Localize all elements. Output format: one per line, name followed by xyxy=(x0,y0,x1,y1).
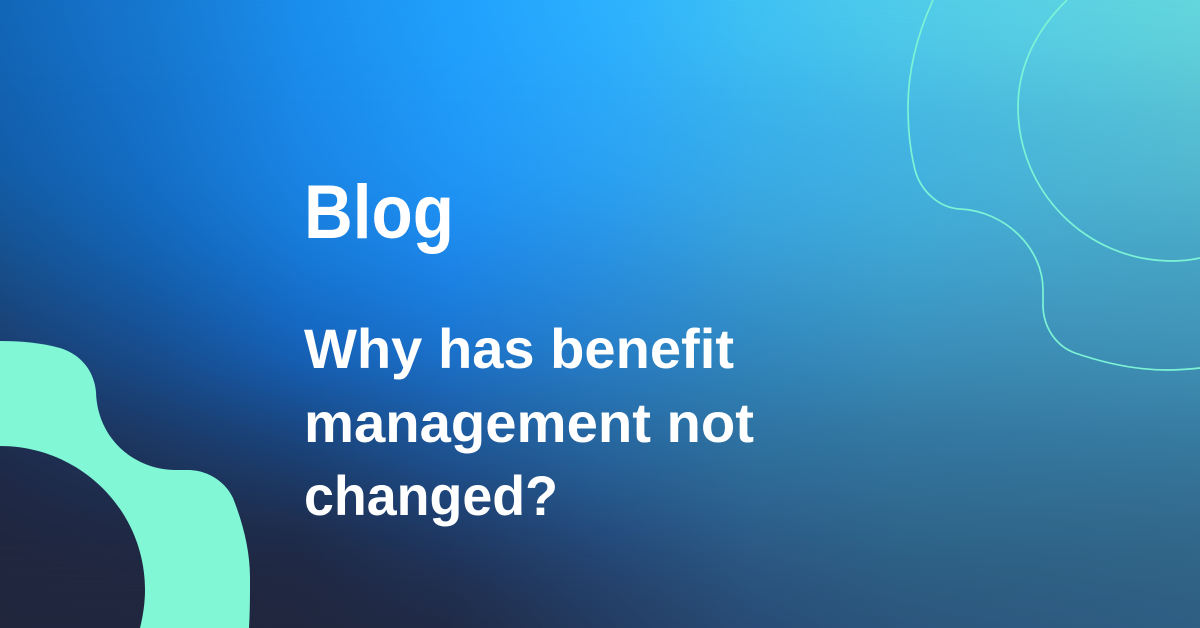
headline line 2: management not xyxy=(304,391,754,454)
headline text xyxy=(304,317,754,527)
title block xyxy=(304,170,754,527)
decorative outlines: top-right xyxy=(908,0,1200,370)
headline line 1: Why has benefit xyxy=(304,317,734,380)
outline: inner circle, clipped to the right and top edges xyxy=(1018,0,1200,261)
outline: outer blob xyxy=(908,0,1200,370)
headline line 3: changed? xyxy=(304,464,558,527)
heading: Blog: Blog xyxy=(304,170,454,255)
decorative shape: bottom-left green ring xyxy=(0,341,250,628)
